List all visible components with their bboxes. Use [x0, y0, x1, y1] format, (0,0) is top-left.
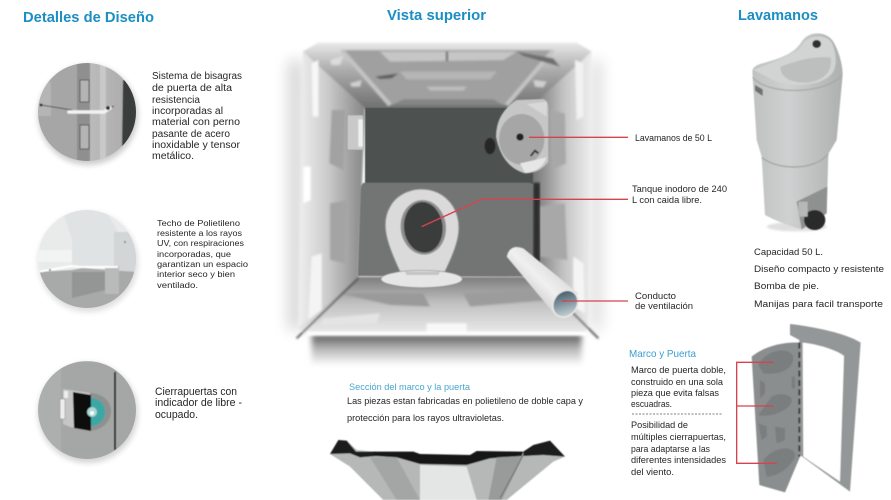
text block: hinges: metálico.	[152, 151, 194, 162]
text block: sección del marco: protección para los rayos ultravioletas.	[347, 413, 504, 423]
drop shadows around cabin	[288, 60, 602, 366]
text block: door closer: indicador de libre -	[155, 397, 242, 409]
text block: roof: Techo de Polietileno	[157, 218, 240, 228]
callout: Conducto de ventilación: de ventilación	[635, 301, 693, 311]
text block: roof	[157, 218, 248, 290]
icon: hinge detail circle	[37, 62, 140, 165]
text block: hinges: incorporadas al	[152, 106, 223, 117]
callout lines	[422, 137, 628, 301]
text block: lavamanos features	[754, 247, 884, 310]
callout: Conducto de ventilación	[635, 291, 693, 311]
text block: marco y puerta: Marco y Puerta	[629, 348, 696, 360]
heading: Detalles de Diseño: Detalles de Diseño	[23, 9, 154, 26]
text block: marco y puerta: diferentes intensidades	[631, 455, 727, 465]
text block: roof: UV, con respiraciones	[157, 238, 244, 248]
text block: hinges: material con perno	[152, 117, 240, 128]
icon: wash basin unit	[752, 33, 843, 231]
text block: marco y puerta: construido en una sola	[631, 377, 723, 387]
icon: roof detail circle	[37, 209, 138, 312]
bracket lines	[737, 362, 777, 463]
door frame	[790, 324, 861, 492]
text block: hinges: resistencia	[152, 95, 200, 106]
door leaf	[752, 343, 800, 492]
text block: lavamanos features: Manijas para facil transporte	[754, 299, 883, 310]
floor wall details	[340, 293, 430, 307]
text block: marco y puerta: escuadras.	[631, 399, 672, 409]
text block: lavamanos features: Bomba de pie.	[754, 281, 819, 292]
text block: hinges	[152, 71, 242, 162]
top view of cabin	[288, 43, 628, 366]
text block: marco y puerta: para adaptarse a las	[631, 444, 710, 454]
icon: door lock indicator circle	[37, 361, 138, 463]
text block: roof: interior seco y bien	[157, 269, 235, 279]
text block: sección del marco: Sección del marco y la puerta	[349, 382, 470, 392]
text block: roof: incorporadas, que	[157, 249, 231, 259]
text block: door closer	[155, 386, 242, 421]
text block: hinges: inoxidable y tensor	[152, 140, 241, 151]
callout: Tanque inodoro	[632, 184, 727, 205]
text block: hinges: de puerta de alta	[152, 83, 232, 94]
text block: door closer: ocupado.	[155, 409, 198, 421]
callout: Tanque inodoro: L con caida libre.	[632, 195, 702, 205]
toilet tank block	[358, 183, 536, 277]
icon: wash basin	[485, 99, 548, 173]
text block: roof: resistente a los rayos	[157, 228, 242, 238]
text block: marco y puerta: pieza que evita falsas	[631, 388, 720, 398]
text block: marco y puerta: del viento.	[631, 467, 674, 477]
walls	[297, 43, 598, 338]
text block: marco y puerta	[629, 348, 727, 477]
icon: paper holder	[347, 115, 363, 150]
wall panels	[329, 110, 345, 170]
back wall	[365, 107, 533, 185]
callout: Tanque inodoro: Tanque inodoro de 240	[632, 184, 727, 194]
callout: Conducto de ventilación: Conducto	[635, 291, 676, 301]
text block: sección del marco	[347, 382, 583, 423]
text block: marco y puerta: Marco de puerta doble,	[631, 365, 726, 375]
icon: toilet seat	[381, 189, 462, 288]
icon: ventilation pipe	[507, 247, 584, 323]
text block: lavamanos features: Diseño compacto y resistente	[754, 264, 884, 275]
heading: Vista superior: Vista superior	[387, 7, 486, 24]
text block: roof: ventilado.	[157, 280, 198, 290]
heading: Lavamanos: Lavamanos	[738, 7, 818, 24]
text block: roof: garantizan un espacio	[157, 259, 248, 269]
text block: sección del marco: Las piezas estan fabricadas en polietileno de doble capa y	[347, 396, 583, 406]
text block: hinges: pasante de acero	[152, 129, 230, 140]
text block: door closer: Cierrapuertas con	[155, 386, 237, 398]
text block: marco y puerta: múltiples cierrapuertas,	[631, 432, 726, 442]
text block: lavamanos features: Capacidad 50 L.	[754, 247, 823, 258]
frame and door section image	[330, 440, 565, 500]
text block: hinges: Sistema de bisagras	[152, 71, 242, 82]
text block: marco y puerta: Posibilidad de	[631, 420, 688, 430]
callout: Lavamanos de 50 L: Lavamanos de 50 L	[635, 133, 712, 143]
door and frame image	[737, 324, 861, 492]
